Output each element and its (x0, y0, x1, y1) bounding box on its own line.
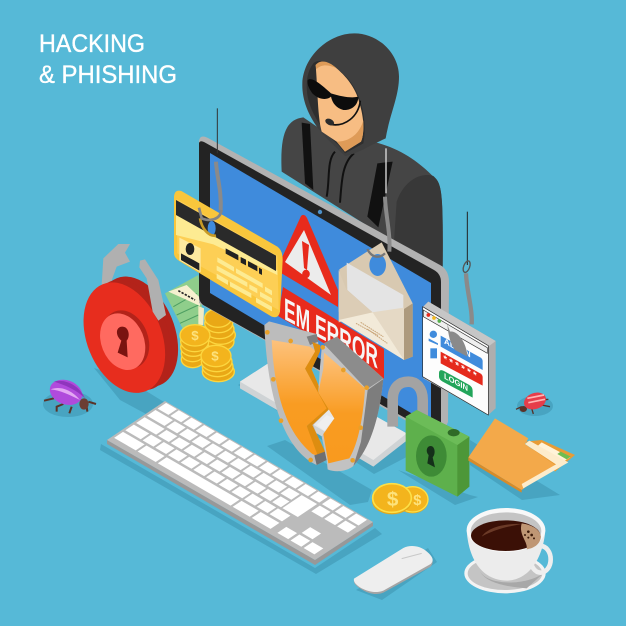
warning triangle (280, 215, 338, 307)
window side (423, 302, 496, 415)
hood strings (327, 152, 354, 203)
fishing hook: envelope shank (385, 148, 390, 252)
lock side (83, 265, 193, 399)
letter lines (356, 322, 387, 343)
left frame (264, 321, 329, 465)
right arm (394, 175, 443, 267)
login window: ADMIN (444, 336, 471, 360)
login window: LOGIN (444, 371, 468, 393)
broken shackle right (139, 259, 166, 321)
broken shackle left (102, 244, 130, 285)
purple bug (44, 375, 96, 413)
envelope (339, 242, 413, 360)
ground shadows (43, 365, 560, 600)
gold coins: $ (387, 488, 399, 511)
head (302, 33, 399, 156)
title: & PHISHING (39, 61, 177, 89)
black bezel (199, 141, 441, 438)
left half (264, 321, 329, 465)
right fold (372, 308, 404, 360)
right orange (318, 353, 365, 463)
shield rivets (265, 330, 369, 463)
keyboard side (107, 440, 373, 565)
password field (441, 352, 483, 386)
login window: ****** (443, 354, 477, 382)
crack band (305, 342, 329, 455)
gray frame (199, 137, 449, 440)
coin stacks (180, 309, 235, 382)
back and flap (339, 242, 413, 360)
left fold (339, 270, 373, 322)
front stack: $ (211, 349, 219, 364)
blue screen (210, 153, 431, 425)
forehead shadow (316, 62, 337, 69)
error banner: EM ERROR (284, 292, 378, 376)
title: HACKING (39, 30, 145, 58)
keyboard base (107, 401, 373, 560)
head (79, 398, 89, 410)
lock recess (94, 303, 158, 375)
username field (441, 336, 483, 370)
gold coins (372, 484, 428, 514)
right frame (318, 337, 383, 471)
credit card (174, 191, 283, 317)
pale band (176, 214, 277, 275)
magnetic stripe (176, 200, 276, 271)
folder (468, 418, 575, 493)
coffee cup (464, 508, 551, 593)
neck shadow (337, 120, 363, 152)
code blocks (226, 248, 262, 275)
hood (302, 33, 399, 156)
shackle (393, 382, 423, 427)
left stack: $ (191, 328, 199, 343)
login window (423, 302, 496, 415)
handle (531, 546, 551, 573)
front fold (339, 312, 404, 360)
coffee (471, 520, 540, 551)
hook point (199, 208, 222, 236)
photo box (179, 238, 201, 272)
title (39, 30, 177, 89)
keyhole (117, 327, 129, 357)
user icon (429, 331, 438, 358)
login button (439, 370, 473, 398)
card face (177, 199, 279, 310)
hook point (367, 249, 385, 257)
right dark side (353, 379, 383, 466)
cash stack (165, 275, 204, 330)
cup shadow on saucer (480, 572, 543, 588)
fishing hook: card shank (216, 108, 221, 210)
keyhole (427, 446, 435, 467)
back stack (205, 309, 235, 351)
left tip (314, 452, 327, 465)
saucer (464, 553, 546, 593)
right half (317, 337, 383, 471)
flap hole (369, 254, 386, 276)
keyhole plate (92, 306, 153, 377)
hook blade (447, 324, 467, 357)
broken shield (264, 321, 383, 471)
person icon (181, 243, 199, 271)
white chunk (317, 415, 334, 431)
letter (347, 263, 403, 313)
gold coins: $ (413, 493, 421, 509)
webcam (318, 210, 322, 214)
keyhole plate (416, 435, 447, 477)
red padlock (68, 244, 193, 405)
legs (44, 398, 96, 413)
paper edge (522, 441, 568, 488)
green padlock (393, 382, 469, 497)
window buttons (426, 313, 430, 317)
folder body (468, 418, 555, 490)
torso (281, 117, 443, 267)
sunglasses (308, 79, 358, 110)
cup rim (467, 508, 545, 552)
left orange (272, 340, 328, 457)
card text lines (217, 257, 272, 311)
exclamation mark (302, 241, 309, 270)
foam (521, 523, 541, 549)
headset mic (324, 101, 360, 127)
face (316, 62, 363, 152)
cup body (467, 530, 545, 581)
lock hole (448, 429, 460, 436)
keys (114, 403, 367, 555)
card hole (208, 221, 216, 236)
hood inner (307, 61, 365, 153)
error banner (278, 287, 384, 379)
hacker figure (281, 33, 443, 267)
monitor stand (240, 360, 407, 467)
lock face (68, 270, 181, 405)
page (423, 307, 488, 415)
fishing hook: login window (462, 212, 472, 324)
right side (404, 303, 413, 360)
lock body (406, 410, 469, 497)
red bug (516, 390, 550, 414)
keyboard (107, 401, 373, 565)
jacket straps (302, 123, 393, 227)
folder tab (525, 440, 575, 472)
body (46, 375, 86, 409)
monitor (199, 137, 449, 440)
mouse (354, 546, 433, 594)
